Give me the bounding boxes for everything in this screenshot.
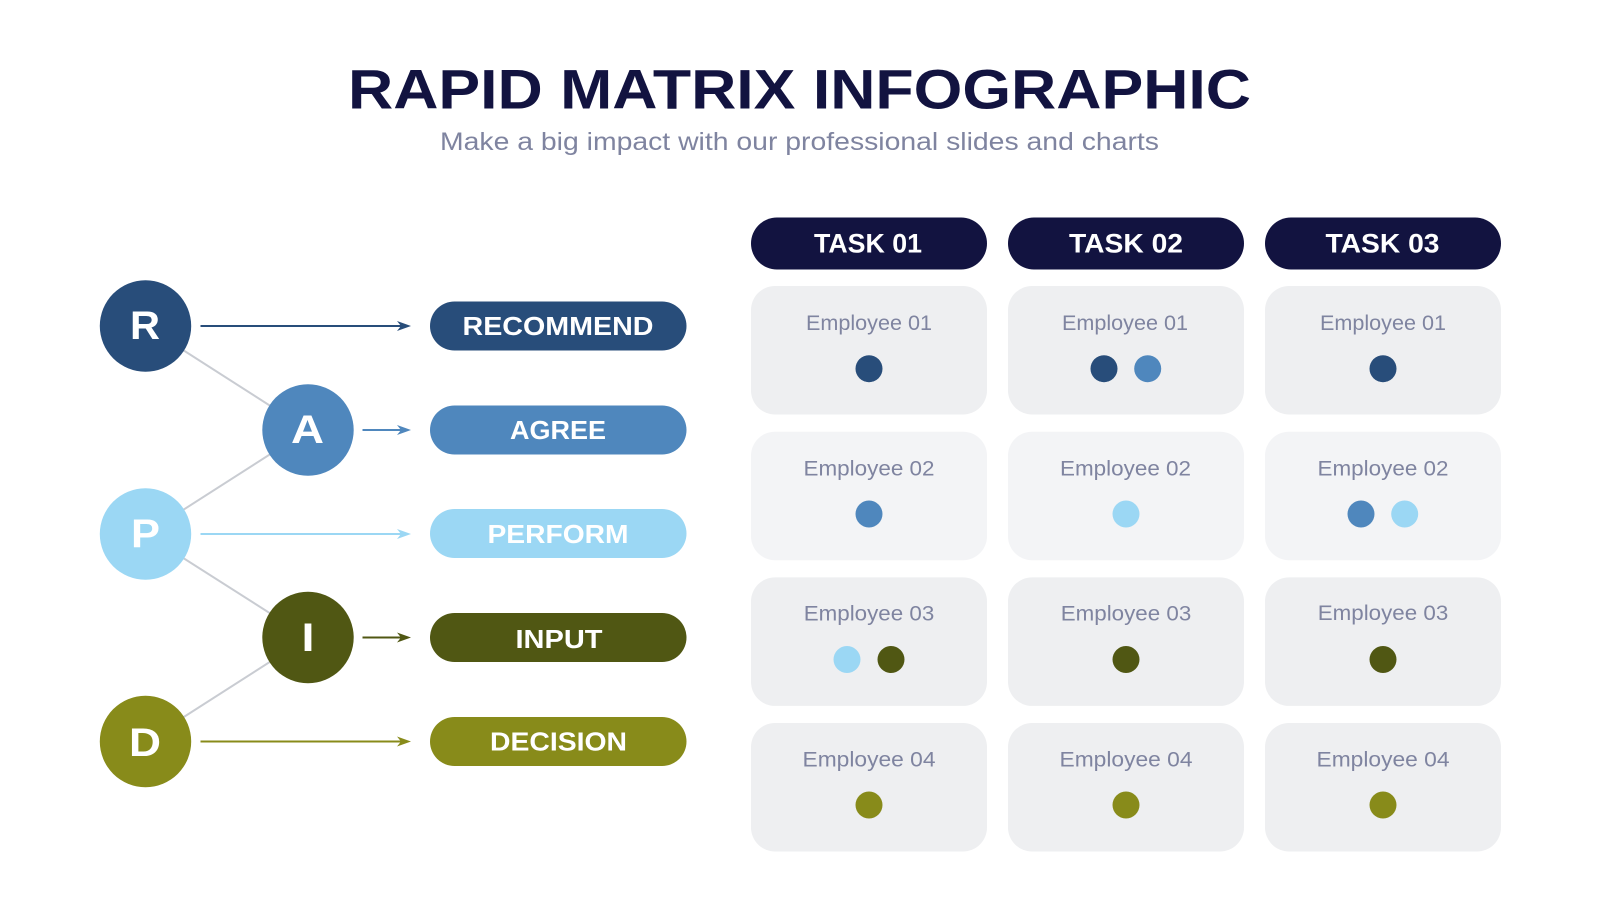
role I: input — [262, 592, 686, 683]
header TASK 03 — [1265, 218, 1501, 270]
title: RAPID MATRIX INFOGRAPHIC — [348, 58, 1251, 120]
circle I: I — [302, 616, 314, 660]
arrow I — [362, 632, 411, 642]
circle A — [262, 384, 354, 476]
header TASK 03: TASK 03 — [1326, 228, 1440, 258]
card employee 03 — [1008, 577, 1244, 706]
card employee 01: Employee 01 — [806, 312, 932, 335]
card employee 03 — [751, 577, 987, 706]
header TASK 02 — [1008, 218, 1244, 270]
pill RECOMMEND: RECOMMEND — [462, 311, 654, 341]
card employee 01 — [1008, 286, 1244, 414]
card employee 04: Employee 04 — [1316, 748, 1450, 772]
header TASK 02: TASK 02 — [1069, 228, 1183, 258]
card employee 01 — [1265, 286, 1501, 414]
pill INPUT — [430, 613, 686, 662]
card employee 01: Employee 01 — [1320, 312, 1446, 335]
role R: recommend — [100, 280, 687, 372]
pill PERFORM: PERFORM — [488, 519, 628, 549]
circle P: P — [131, 512, 160, 556]
circle I — [262, 592, 354, 683]
circle R — [100, 280, 191, 372]
role P: perform — [100, 488, 687, 580]
header TASK 01: TASK 01 — [814, 228, 922, 258]
card employee 03 — [1265, 577, 1501, 706]
role D: decision — [100, 696, 687, 787]
card employee 02 — [1265, 432, 1501, 560]
card employee 01 — [751, 286, 987, 414]
pill INPUT: INPUT — [516, 624, 603, 654]
card employee 02 — [751, 432, 987, 560]
card employee 03: Employee 03 — [1318, 602, 1448, 625]
header TASK 01 — [751, 218, 987, 270]
pill DECISION: DECISION — [490, 726, 627, 756]
card employee 04 — [1008, 723, 1244, 852]
card employee 04: Employee 04 — [1060, 748, 1193, 772]
pill PERFORM — [430, 509, 686, 558]
pill RECOMMEND — [430, 302, 686, 350]
card employee 03: Employee 03 — [1061, 603, 1191, 626]
card employee 02: Employee 02 — [1318, 458, 1448, 480]
pill DECISION — [430, 717, 686, 766]
card employee 02: Employee 02 — [1060, 458, 1191, 480]
arrow R — [200, 321, 411, 331]
card employee 04 — [751, 723, 987, 852]
card employee 04: Employee 04 — [802, 748, 936, 772]
column: task 03 — [1265, 218, 1501, 852]
circle P — [100, 488, 191, 580]
card employee 02: Employee 02 — [804, 458, 934, 480]
column: task 02 — [1008, 218, 1244, 852]
card employee 02 — [1008, 432, 1244, 560]
subtitle: Make a big impact with our professional slides and charts — [440, 128, 1159, 156]
arrow D — [200, 736, 411, 746]
arrow P — [200, 529, 411, 539]
connector lines between role circles — [146, 326, 308, 742]
card employee 04 — [1265, 723, 1501, 852]
circle D: D — [129, 721, 161, 765]
card employee 03: Employee 03 — [804, 603, 934, 626]
card employee 01: Employee 01 — [1062, 312, 1188, 335]
role A: agree — [262, 384, 686, 476]
circle D — [100, 696, 191, 787]
arrow A — [362, 425, 411, 435]
circle R: R — [130, 304, 160, 348]
pill AGREE — [430, 406, 686, 454]
column: task 01 — [751, 218, 987, 852]
pill AGREE: AGREE — [510, 415, 606, 445]
circle A: A — [291, 408, 324, 452]
